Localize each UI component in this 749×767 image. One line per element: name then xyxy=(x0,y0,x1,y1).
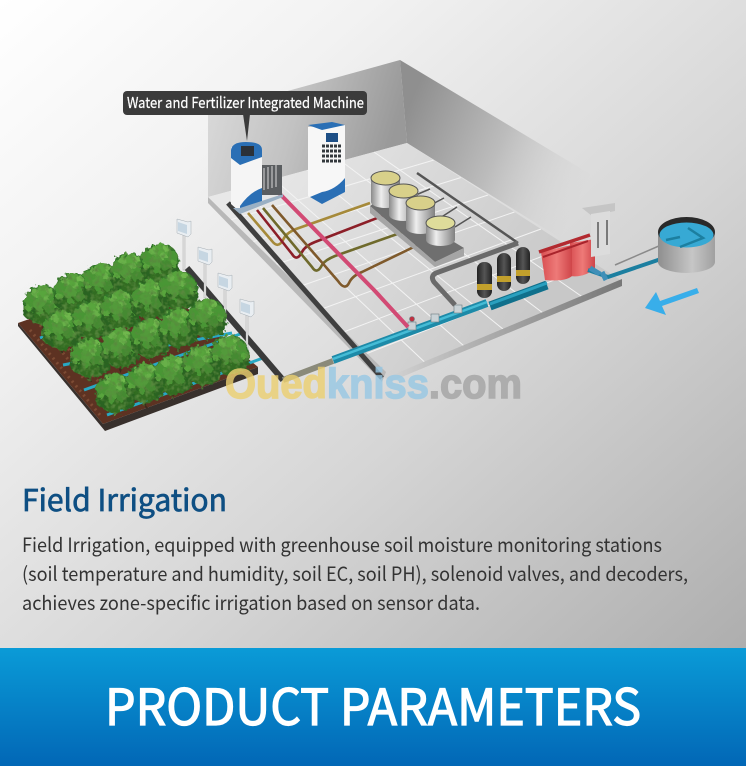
sensor stations xyxy=(177,219,254,350)
tree rows xyxy=(23,243,250,417)
pipe valves xyxy=(408,305,462,330)
fertilizer tank platform xyxy=(370,198,464,267)
sand filters xyxy=(477,247,530,298)
body text: (soil temperature and humidity, soil EC, soil PH), solenoid valves, and decoders, xyxy=(22,558,688,587)
connecting pipe xyxy=(283,361,333,380)
field main pipe xyxy=(187,268,283,380)
room floor xyxy=(208,143,622,382)
drip lines xyxy=(40,280,263,415)
flow arrow xyxy=(645,288,699,315)
back drain pipe xyxy=(228,203,382,378)
machine label callout: Water and Fertilizer Integrated Machine xyxy=(127,92,364,113)
water pool xyxy=(658,217,715,273)
fertilizer pipes xyxy=(248,192,422,327)
body text: Field Irrigation, equipped with greenhouse soil moisture monitoring stations xyxy=(22,529,662,558)
gray return pipe xyxy=(411,173,518,305)
body text xyxy=(22,529,688,616)
machine: water and fertilizer xyxy=(231,142,283,214)
banner: PRODUCT PARAMETERS xyxy=(105,668,641,740)
main blue pipe xyxy=(333,283,547,360)
blue outlet pipes xyxy=(588,237,704,280)
fertilizer tanks xyxy=(371,171,455,246)
watermark: Ouedkniss.com xyxy=(225,360,522,407)
machine label callout xyxy=(123,91,367,141)
red filter tanks xyxy=(539,235,595,280)
body text: achieves zone-specific irrigation based on sensor data. xyxy=(22,587,480,616)
heading: Field Irrigation xyxy=(22,476,227,520)
field soil bed xyxy=(18,277,258,431)
water intake stand xyxy=(582,203,615,257)
room walls xyxy=(208,60,590,238)
banner xyxy=(0,648,746,766)
machine: control cabinet xyxy=(308,122,345,204)
illustration: irrigation system xyxy=(18,60,715,431)
